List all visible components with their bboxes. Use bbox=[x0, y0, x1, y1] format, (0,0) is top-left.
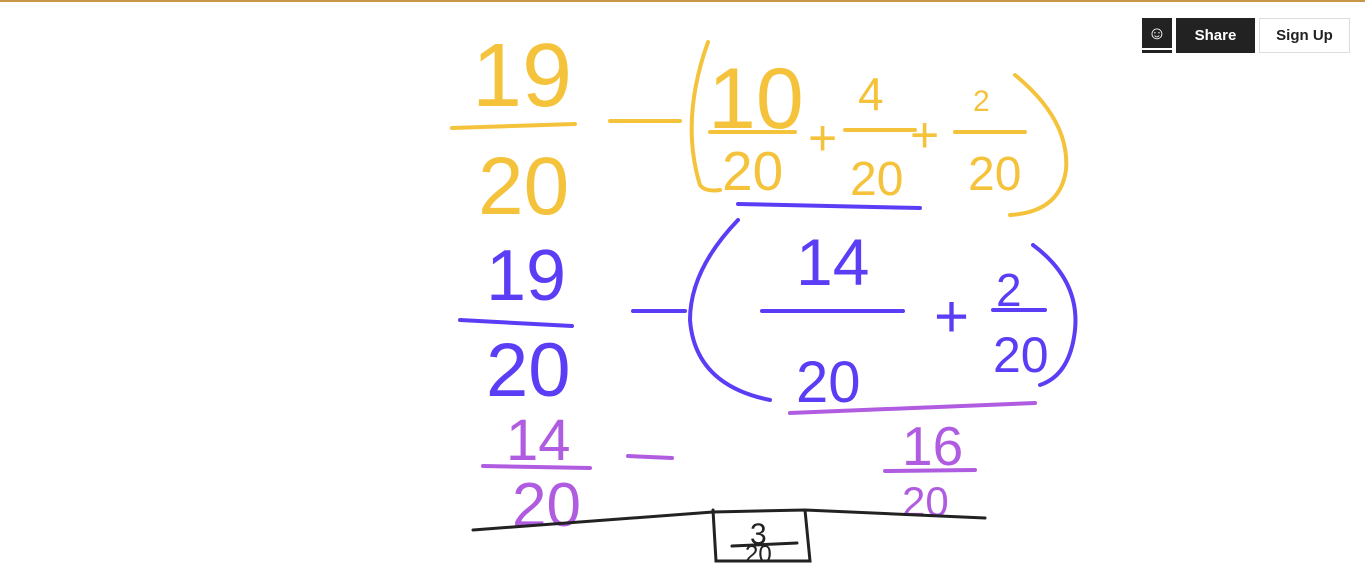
row 1: yellow expression: + bbox=[808, 110, 837, 166]
row 2: blue expression bbox=[460, 204, 1075, 415]
row 2: blue expression: 20 bbox=[486, 328, 571, 413]
row 1: yellow expression: 19 bbox=[472, 26, 572, 126]
row 1: yellow expression: 4 bbox=[858, 68, 884, 120]
row 2: blue expression: 2 bbox=[996, 264, 1022, 316]
row 1: yellow expression: 20 bbox=[478, 141, 569, 232]
row 3: purple expression: 16 bbox=[902, 415, 963, 477]
row 2: blue expression: 20 bbox=[796, 350, 861, 415]
row 1: yellow expression: 20 bbox=[722, 140, 783, 202]
answer: black box 3/20 bbox=[473, 510, 985, 568]
row 1: yellow expression: + bbox=[910, 107, 939, 163]
row 2: blue expression: 14 bbox=[796, 225, 869, 299]
row 1: yellow expression: 10 bbox=[708, 51, 804, 147]
row 2: blue expression: 20 bbox=[993, 327, 1049, 383]
sign up button bbox=[1259, 18, 1350, 53]
logo icon: ☺ bbox=[1148, 23, 1166, 43]
row 1: yellow expression bbox=[452, 26, 1066, 232]
answer: black box 3/20: 20 bbox=[745, 541, 772, 568]
share button bbox=[1176, 18, 1255, 53]
sign up button: Sign Up bbox=[1276, 27, 1333, 44]
row 3: purple expression: 20 bbox=[902, 478, 949, 525]
row 1: yellow expression: 20 bbox=[968, 148, 1021, 201]
answer: black box 3/20: 3 bbox=[750, 518, 767, 551]
row 1: yellow expression: 2 bbox=[973, 85, 990, 118]
logo icon bbox=[1142, 18, 1172, 53]
row 3: purple expression: 14 bbox=[506, 408, 571, 473]
row 2: blue expression: 19 bbox=[486, 236, 566, 316]
row 3: purple expression: 20 bbox=[512, 471, 581, 540]
row 3: purple expression bbox=[483, 403, 1035, 540]
top border bbox=[0, 0, 1365, 2]
row 1: yellow expression: 20 bbox=[850, 153, 903, 206]
row 2: blue expression: + bbox=[934, 283, 969, 350]
share button: Share bbox=[1195, 27, 1236, 44]
